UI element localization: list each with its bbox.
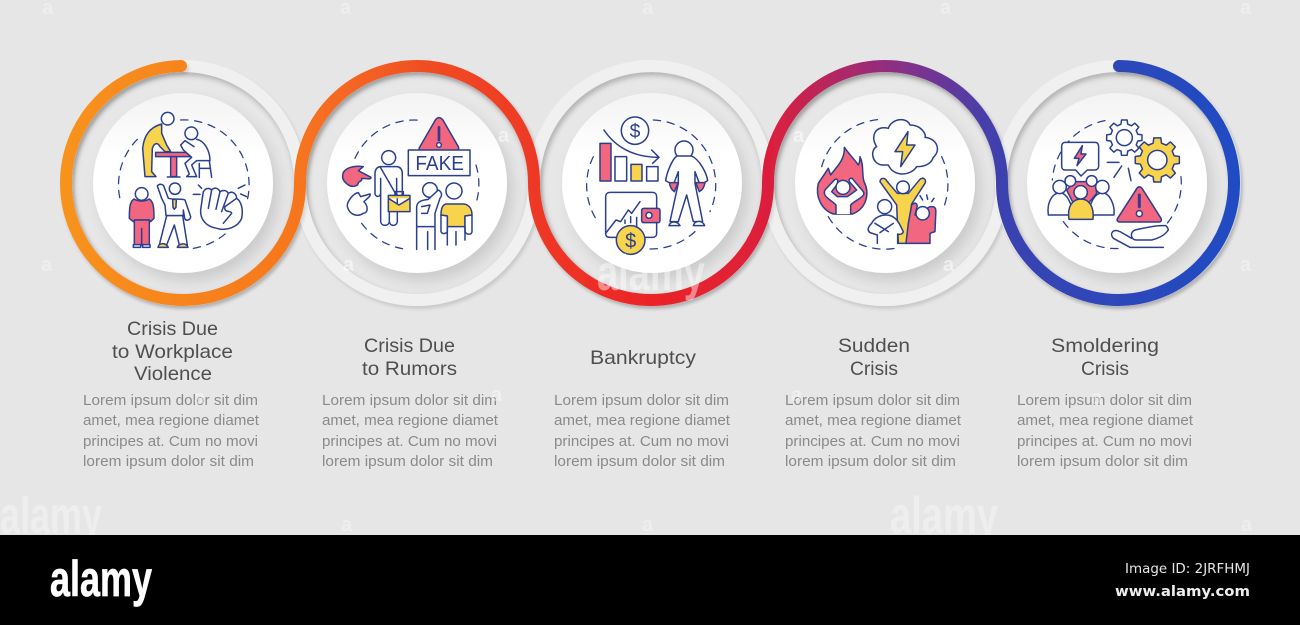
text block: sudden crisis: [785, 393, 961, 470]
text block: rumors: lorem ipsum dolor sit dim: [322, 454, 493, 470]
footer logo: alamy: [50, 551, 152, 607]
text block: rumors: principes at. Cum no movi: [322, 434, 497, 450]
icon: bankruptcy: $: [630, 122, 641, 143]
icon: smoldering crisis: [1048, 120, 1181, 249]
step 3 text: [554, 347, 730, 470]
text block: bankruptcy: [554, 393, 730, 470]
text block: bankruptcy: principes at. Cum no movi: [554, 434, 729, 450]
text block: smoldering crisis: [1017, 393, 1193, 470]
image id: Image ID: 2JRFHMJ: [1125, 561, 1250, 577]
step 4 text: [785, 335, 961, 470]
icon: workplace violence: [119, 112, 249, 248]
watermarks over icons: a: [343, 254, 355, 276]
icon: fake news rumors: FAKE: [415, 152, 464, 175]
text block: workplace violence: principes at. Cum no movi: [83, 434, 258, 450]
footer bar: [0, 535, 1300, 625]
heading: rumors: to Rumors: [362, 358, 457, 380]
text block: workplace violence: Lorem ipsum dolor sit dim: [83, 393, 258, 409]
watermarks: alamy: [890, 487, 998, 545]
watermarks over text: a: [791, 384, 803, 406]
panel: white discs: [93, 93, 1207, 273]
step 5 text: [1017, 335, 1193, 470]
heading: rumors: Crisis Due: [364, 335, 455, 357]
watermarks over text: a: [194, 387, 206, 409]
heading: smoldering crisis: Smoldering: [1051, 335, 1159, 357]
website: www.alamy.com: [1115, 584, 1250, 600]
heading: sudden crisis: Crisis: [850, 358, 898, 380]
text block: bankruptcy: Lorem ipsum dolor sit dim: [554, 393, 729, 409]
text block: smoldering crisis: Lorem ipsum dolor sit dim: [1017, 393, 1192, 409]
heading: sudden crisis: Sudden: [838, 335, 910, 357]
heading: workplace violence: Crisis Due: [127, 318, 218, 340]
text block: smoldering crisis: lorem ipsum dolor sit dim: [1017, 454, 1188, 470]
icon: bankruptcy: $: [625, 230, 636, 252]
flowing gradient line: [66, 66, 1234, 300]
text block: rumors: amet, mea regione diamet: [322, 413, 498, 429]
text block: smoldering crisis: amet, mea regione diamet: [1017, 413, 1193, 429]
text block: workplace violence: amet, mea regione diamet: [83, 413, 259, 429]
watermarks over icons: a: [498, 125, 510, 147]
icon: bankruptcy: [587, 117, 716, 254]
watermarks over text: a: [1091, 387, 1103, 409]
text block: bankruptcy: lorem ipsum dolor sit dim: [554, 454, 725, 470]
watermarks over text: a: [491, 384, 503, 406]
text block: workplace violence: [83, 393, 259, 470]
heading: bankruptcy: Bankruptcy: [590, 347, 696, 369]
heading: workplace violence: [112, 318, 233, 385]
watermarks over icons: a: [793, 125, 805, 147]
text block: sudden crisis: Lorem ipsum dolor sit dim: [785, 393, 960, 409]
text block: bankruptcy: amet, mea regione diamet: [554, 413, 730, 429]
icon: fake news rumors: [343, 118, 479, 249]
watermarks over text: [194, 384, 1103, 409]
step 1 text: [83, 318, 259, 470]
watermarks: alamy: [0, 487, 102, 545]
heading: workplace violence: to Workplace: [112, 341, 233, 363]
heading: rumors: [362, 335, 457, 380]
step 2 text: [322, 335, 498, 470]
text block: rumors: [322, 393, 498, 470]
text block: sudden crisis: principes at. Cum no movi: [785, 434, 960, 450]
text block: workplace violence: lorem ipsum dolor sit dim: [83, 454, 254, 470]
heading: smoldering crisis: [1051, 335, 1159, 380]
text block: sudden crisis: amet, mea regione diamet: [785, 413, 961, 429]
heading: sudden crisis: [838, 335, 910, 380]
watermarks: a: [1240, 254, 1252, 276]
watermarks: a: [41, 254, 53, 276]
icon: sudden crisis: [817, 119, 948, 249]
watermarks over icons: alamy: [597, 245, 705, 301]
heading: workplace violence: Violence: [134, 363, 212, 385]
watermarks: a: [1241, 514, 1253, 536]
text block: smoldering crisis: principes at. Cum no movi: [1017, 434, 1192, 450]
watermarks over icons: [343, 125, 955, 301]
text block: sudden crisis: lorem ipsum dolor sit dim: [785, 454, 956, 470]
heading: smoldering crisis: Crisis: [1081, 358, 1129, 380]
panel: ring backgrounds: [66, 66, 1235, 300]
watermarks: a: [642, 514, 654, 536]
watermarks over icons: a: [943, 254, 955, 276]
watermarks: a: [341, 514, 353, 536]
text block: rumors: Lorem ipsum dolor sit dim: [322, 393, 497, 409]
